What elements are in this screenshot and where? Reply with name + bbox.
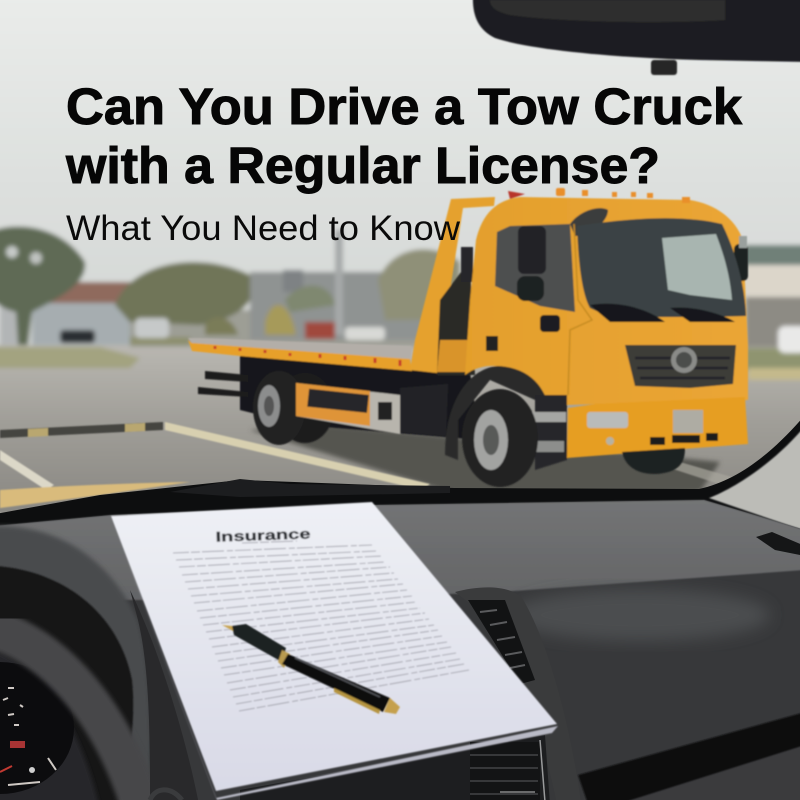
tow truck xyxy=(188,188,748,487)
front wheel arch and wheel xyxy=(445,366,567,487)
title xyxy=(65,78,743,194)
windshield base black band xyxy=(0,415,800,540)
flatbed deck xyxy=(188,338,412,371)
gauge opening xyxy=(0,566,133,800)
sunlit dashboard top xyxy=(0,500,800,600)
background: sky and parking lot xyxy=(0,0,800,515)
dashboard xyxy=(0,415,800,800)
grille and emblem xyxy=(625,345,736,388)
document body lines xyxy=(173,541,469,711)
right centre vent xyxy=(455,587,582,800)
chassis and underside xyxy=(240,352,480,440)
fuel box xyxy=(400,384,448,436)
road markings xyxy=(0,422,735,508)
steering wheel rim xyxy=(0,628,142,800)
roof lights xyxy=(508,188,690,203)
document heading: Insurance xyxy=(215,525,311,545)
side guard xyxy=(296,383,400,434)
side window xyxy=(495,224,575,312)
front bumper xyxy=(567,397,748,458)
rear bars xyxy=(198,371,248,397)
insurance document xyxy=(111,502,558,800)
winch machinery xyxy=(437,260,475,375)
title line 1: Can You Drive a Tow Cruck xyxy=(66,78,743,135)
title line 2: with a Regular License? xyxy=(65,137,660,194)
side mirrors xyxy=(517,208,748,301)
dash lower shadow band xyxy=(578,712,800,800)
cab body xyxy=(465,197,748,405)
steering column area xyxy=(0,650,100,800)
headboard ramp xyxy=(410,197,495,373)
right pillar xyxy=(709,426,800,531)
dash lower strip xyxy=(615,745,800,800)
pen xyxy=(222,624,400,714)
dash soft highlight xyxy=(510,589,770,641)
rear wheels xyxy=(253,371,334,445)
gauge markings xyxy=(0,662,74,794)
far front wheel xyxy=(622,448,685,474)
wiper blade xyxy=(170,479,450,497)
subtitle: What You Need to Know xyxy=(66,209,461,248)
windshield xyxy=(577,218,746,322)
lower centre controls xyxy=(240,735,550,800)
dashboard top-right vent xyxy=(756,532,800,556)
rear-view mirror xyxy=(473,0,800,75)
binnacle hood xyxy=(0,526,151,800)
stalk xyxy=(150,790,182,800)
door details xyxy=(568,224,592,395)
paper sheet xyxy=(111,502,557,791)
truck shadow on road xyxy=(250,425,720,492)
dashboard body xyxy=(0,500,800,800)
textured trim xyxy=(130,590,200,800)
